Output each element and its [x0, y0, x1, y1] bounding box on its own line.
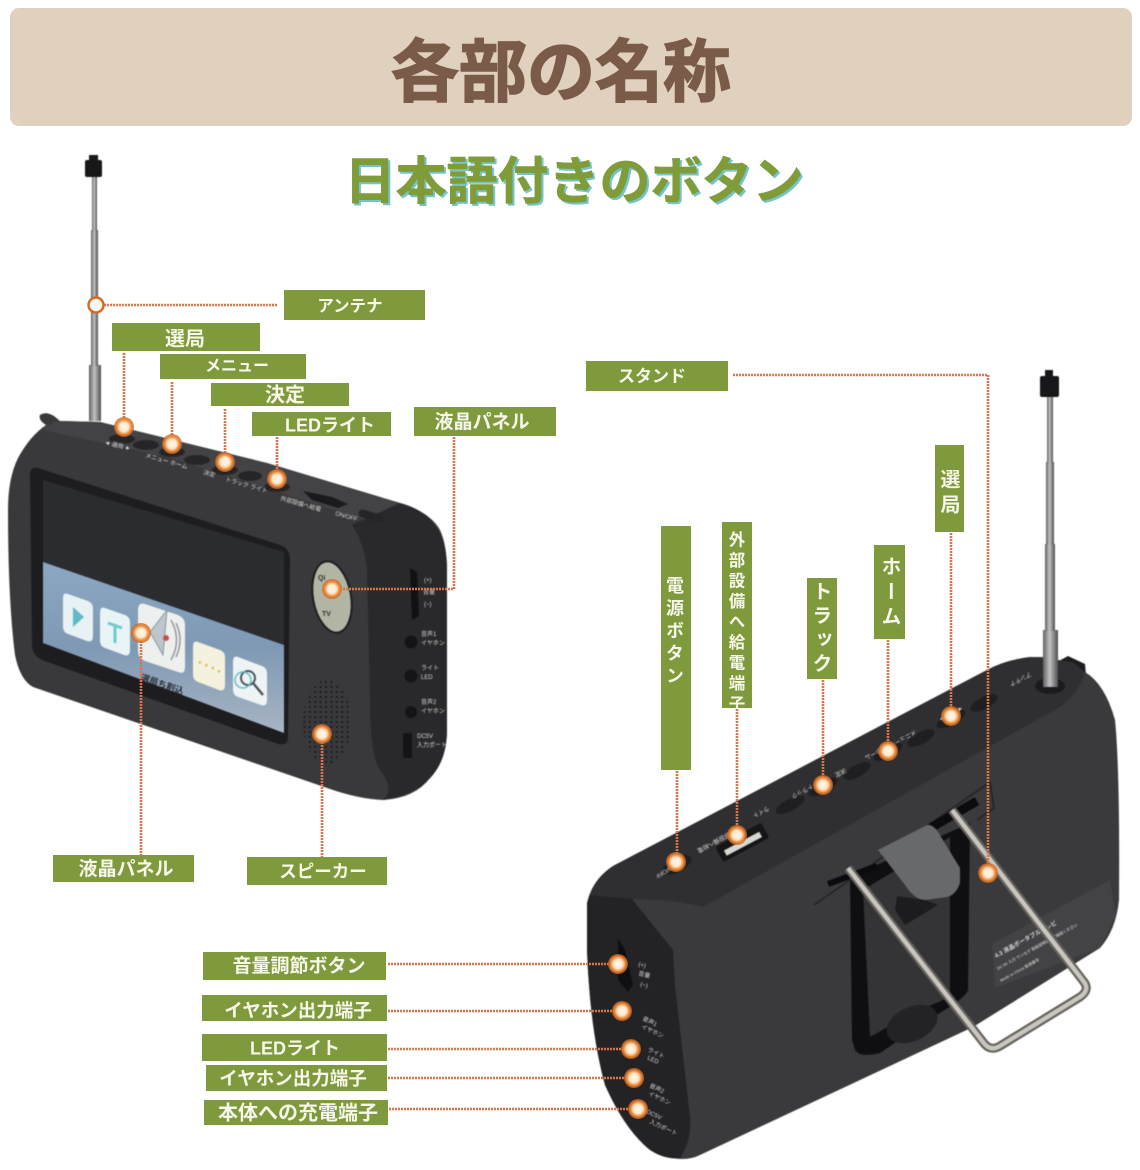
side controls rear: 音声2	[648, 1082, 666, 1096]
side controls: 音量	[423, 588, 435, 596]
callout: 音量調節ボタン	[203, 952, 628, 980]
callout: イヤホン出力端子 2	[206, 1065, 644, 1091]
rear top labels: ◄ 選局 ►	[937, 704, 965, 724]
screen bezel	[30, 468, 290, 744]
callout: イヤホン出力端子 1: イヤホン出力端子	[224, 1000, 372, 1021]
callout: 決定: 決定	[265, 384, 305, 406]
side controls: イヤホン	[421, 708, 445, 715]
top labels: 外部設備へ給電	[279, 494, 322, 514]
product sticker: 4.3 液晶ポータブルテレビ	[993, 919, 1058, 960]
callout: アンテナ	[88, 290, 425, 320]
USB port rear	[715, 823, 769, 862]
left antenna	[85, 155, 102, 421]
top labels: ◄ 選局 ►	[104, 438, 132, 453]
rear top labels: アンテナ	[1008, 670, 1032, 688]
recess plate	[863, 837, 950, 1037]
top labels: メニュー ホーム	[144, 452, 188, 471]
side controls rear: イヤホン	[647, 1090, 672, 1107]
left device: front view	[8, 155, 447, 800]
rear top labels: 外部設備へ給電	[696, 828, 737, 855]
right antenna	[1040, 370, 1059, 688]
rear top labels: 決定	[833, 766, 848, 779]
app icons	[63, 594, 267, 705]
callout: イヤホン出力端子 1	[202, 995, 632, 1021]
callout: 外部設備へ給電端子 vertical: 外部設備へ給電端子	[726, 531, 745, 716]
subtitle: 日本語付きのボタン	[344, 153, 804, 210]
screen caption: 選局ち割込	[139, 671, 185, 697]
Qi badge: Qi	[318, 575, 325, 582]
callout: 液晶パネル bottom	[53, 623, 194, 882]
rear top labels: ライト	[751, 804, 770, 819]
rear top labels: トラック	[790, 782, 814, 800]
callout: LEDライト: LEDライト	[285, 416, 375, 436]
side controls: (+)	[424, 578, 432, 584]
product sticker: Made in China 製造番号	[999, 956, 1040, 983]
top labels: トラック ライト	[224, 476, 268, 495]
side controls: LED	[421, 675, 433, 681]
callout: 電源ボタン vertical	[661, 526, 691, 872]
callout: 選局 vertical	[935, 445, 964, 726]
side controls: (−)	[424, 602, 432, 608]
top buttons	[109, 434, 385, 524]
screen glass	[43, 480, 284, 645]
right device: rear view	[587, 370, 1119, 1159]
Qi badge	[307, 558, 357, 636]
side controls: 音声2	[421, 698, 437, 706]
side controls: 音声1	[421, 630, 437, 638]
callout: 液晶パネル top: 液晶パネル	[434, 411, 530, 433]
top labels	[104, 438, 358, 523]
stand slot outline	[814, 782, 994, 905]
side panel	[352, 503, 447, 800]
title banner	[10, 8, 1132, 126]
callout: ホーム vertical: ホーム	[878, 556, 900, 631]
top strip	[43, 421, 414, 533]
body shell	[8, 413, 447, 800]
product sticker	[992, 880, 1116, 988]
callout: 液晶パネル bottom: 液晶パネル	[78, 858, 174, 880]
speaker grille	[303, 680, 351, 764]
stand slots	[828, 866, 877, 884]
side controls rear: イヤホン	[640, 1023, 665, 1040]
side controls rear: 入力ポート	[648, 1118, 679, 1137]
rear top labels	[654, 670, 1032, 878]
side controls rear	[618, 938, 679, 1137]
Qi badge: TV	[322, 611, 331, 618]
callout: 液晶パネル top	[322, 407, 556, 599]
side controls rear: (−)	[640, 982, 648, 990]
callout: LEDライト side: LEDライト	[250, 1038, 340, 1058]
title text: 各部の名称	[391, 35, 731, 111]
callout: 本体への充電端子: 本体への充電端子	[218, 1102, 378, 1124]
screen wallpaper	[43, 562, 284, 733]
side controls: イヤホン	[421, 640, 445, 647]
top labels: 決定	[202, 468, 216, 479]
side controls rear: (+)	[638, 962, 646, 970]
USB port	[303, 491, 348, 508]
callout: スピーカー: スピーカー	[279, 862, 367, 882]
rear shell	[587, 657, 1119, 1159]
side controls: ライト	[421, 665, 439, 672]
side controls	[403, 568, 447, 758]
callout: ホーム vertical	[874, 545, 905, 761]
callout: 本体への充電端子	[204, 1099, 648, 1125]
callout: 選局	[112, 323, 260, 437]
top buttons rear	[660, 691, 1000, 879]
callout: トラック vertical	[807, 578, 837, 795]
callout: 選局 vertical: 選局	[937, 469, 960, 519]
callout: アンテナ: アンテナ	[317, 298, 383, 316]
side controls: 入力ポート	[417, 741, 447, 749]
callout: 電源ボタン vertical: 電源ボタン	[664, 576, 684, 688]
callout: スピーカー	[247, 724, 387, 885]
callout: 音量調節ボタン: 音量調節ボタン	[232, 955, 366, 977]
side controls: DC5V	[417, 734, 433, 740]
side controls rear: DC5V	[645, 1109, 662, 1122]
callout: スタンド	[586, 361, 998, 883]
callout: 外部設備へ給電端子 vertical	[722, 522, 752, 845]
callout: LEDライト side	[202, 1034, 641, 1061]
rear top labels: ON/OFF	[654, 862, 677, 878]
callout: スタンド: スタンド	[618, 367, 686, 386]
side controls rear: LED	[646, 1055, 660, 1066]
rear hinge tab	[1057, 656, 1086, 675]
side controls rear: 音量	[638, 969, 651, 980]
stand recess	[850, 823, 970, 1055]
callout: LEDライト	[252, 412, 391, 489]
metal stand wire	[848, 810, 1086, 1048]
rear top labels: メニュー	[893, 728, 917, 746]
callout: 決定	[211, 383, 349, 472]
top strip rear	[590, 657, 1085, 907]
callout: トラック vertical: トラック	[809, 581, 831, 677]
grey clip	[878, 825, 960, 900]
rear top labels: ホーム	[863, 746, 882, 761]
side controls rear: ライト	[646, 1046, 665, 1060]
callout: イヤホン出力端子 2: イヤホン出力端子	[219, 1068, 367, 1089]
callout: メニュー: メニュー	[205, 358, 269, 375]
top labels: ON/OFF	[334, 511, 358, 523]
callout: 選局: 選局	[165, 328, 205, 350]
side controls rear: 音声1	[641, 1015, 659, 1029]
product sticker: DC 5V 入力 ワンセグ 取扱説明書をご確認ください	[996, 921, 1078, 971]
callout: メニュー	[160, 354, 306, 454]
antenna socket	[1035, 678, 1065, 694]
recess thumb notch	[880, 997, 944, 1051]
left side panel	[587, 895, 690, 1158]
